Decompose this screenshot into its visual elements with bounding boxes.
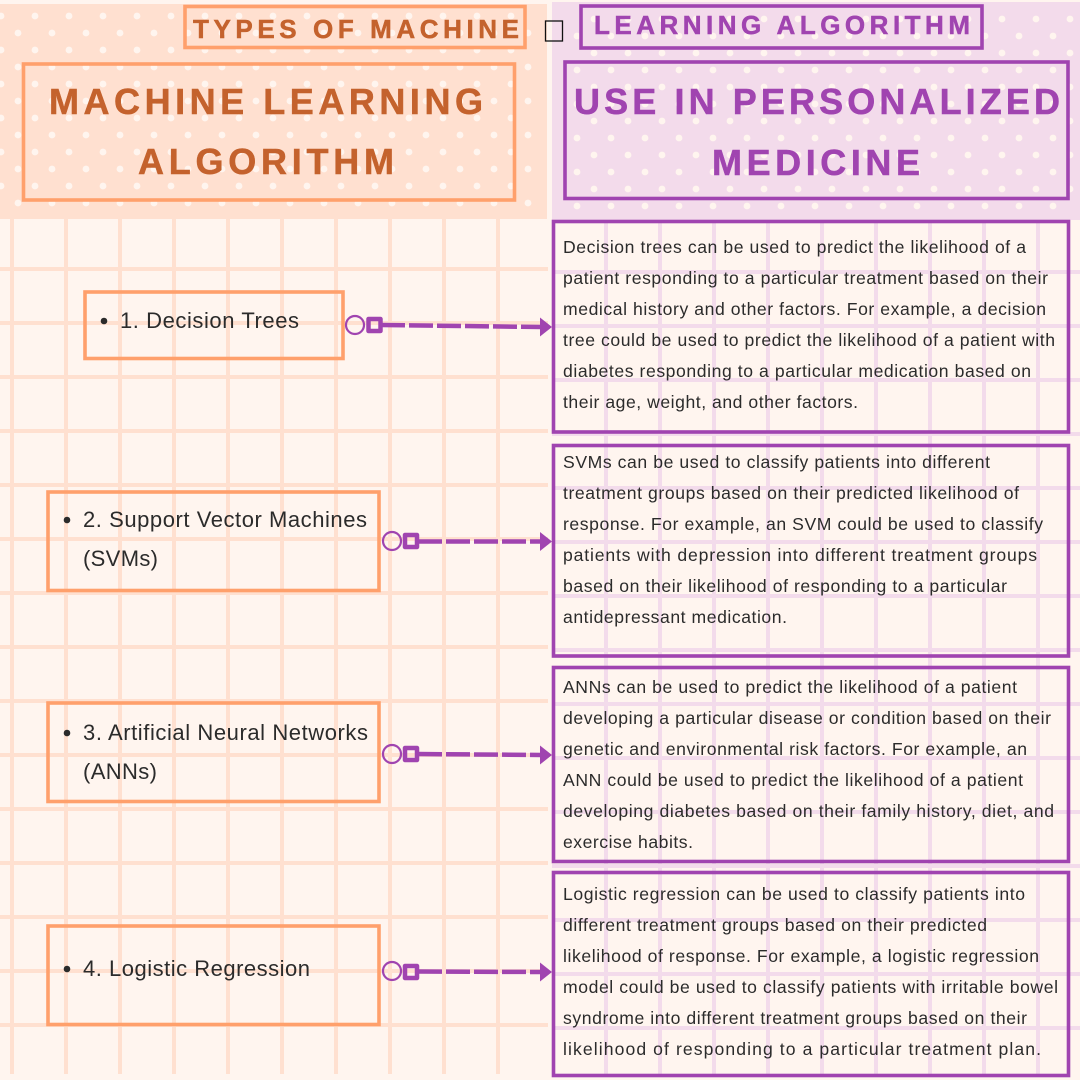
description 2: patients with depression into different treatment groups [563, 545, 1037, 565]
description 1 [554, 222, 1068, 432]
algorithm 3: artificial neural networks: (ANNs) [83, 759, 157, 784]
description 4: model could be used to classify patients with irritable bowel [563, 977, 1058, 997]
panel: left header background [0, 4, 547, 219]
description 3: ANNs can be used to predict the likelihood of a patient [563, 677, 1017, 697]
description 3: exercise habits. [563, 832, 693, 852]
description 2 [554, 446, 1068, 656]
description 4: likelihood of response. For example, a logistic regression [563, 946, 1039, 966]
description 3: developing a particular disease or condition based on their [563, 708, 1051, 728]
algorithm 1: decision trees: 1. Decision Trees [120, 308, 299, 333]
description 2: antidepressant medication. [563, 607, 787, 627]
arrow: svm to description [383, 532, 552, 551]
description 1: medical history and other factors. For example, a decision [563, 299, 1046, 319]
description 3: developing diabetes based on their family history, diet, and [563, 801, 1054, 821]
arrow: decision trees to description [346, 316, 552, 336]
title right part [581, 6, 982, 48]
algorithm 3: artificial neural networks: 3. Artificial Neural Networks [83, 720, 368, 745]
description 1: their age, weight, and other factors. [563, 392, 858, 412]
description 1: Decision trees can be used to predict the likelihood of a [563, 237, 1026, 257]
description 3 [554, 668, 1068, 862]
title left part: TYPES OF MACHINE [193, 14, 519, 44]
heading: use in personalized medicine [565, 62, 1068, 198]
algorithm 3: artificial neural networks [48, 703, 379, 802]
description 2: SVMs can be used to classify patients into different [563, 452, 990, 472]
arrow: ann to description [383, 745, 552, 764]
description 1: tree could be used to predict the likelihood of a patient with [563, 330, 1055, 350]
heading: machine learning algorithm: ALGORITHM [138, 141, 394, 182]
description 2: response. For example, an SVM could be used to classify [563, 514, 1043, 534]
description 4: Logistic regression can be used to classify patients into [563, 884, 1025, 904]
algorithm 4: logistic regression [48, 926, 379, 1024]
panel: right header background [552, 2, 1080, 220]
description 2: treatment groups based on their predicted likelihood of [563, 483, 1019, 503]
grid background: right column [552, 220, 1080, 1074]
description 2: based on their likelihood of responding to a particular [563, 576, 1007, 596]
heading: machine learning algorithm [24, 64, 514, 200]
icon: missing glyph box [546, 21, 562, 41]
description 3: ANN could be used to predict the likelihood of a patient [563, 770, 1023, 790]
algorithm 2: support vector machines [48, 492, 379, 590]
arrow: logistic regression to description [383, 962, 552, 982]
algorithm 2: support vector machines: (SVMs) [83, 546, 158, 571]
grid background: left column [0, 219, 548, 1074]
description 1: patient responding to a particular treatment based on their [563, 268, 1048, 288]
algorithm 1: decision trees [85, 292, 343, 358]
description 4: likelihood of responding to a particular treatment plan. [563, 1039, 1041, 1059]
description 3: genetic and environmental risk factors. For example, an [563, 739, 1027, 759]
description 1: diabetes responding to a particular medication based on [563, 361, 1031, 381]
heading: machine learning algorithm: MACHINE LEARNING [49, 81, 483, 122]
description 4: different treatment groups based on their predicted [563, 915, 987, 935]
algorithm 2: support vector machines: 2. Support Vector Machines [83, 507, 367, 532]
heading: use in personalized medicine: USE IN PERSONALIZED [574, 81, 1060, 122]
title right part: LEARNING ALGORITHM [594, 10, 970, 40]
description 4: syndrome into different treatment groups based on their [563, 1008, 1027, 1028]
algorithm 4: logistic regression: 4. Logistic Regression [83, 956, 310, 981]
heading: use in personalized medicine: MEDICINE [712, 142, 920, 183]
description 4 [554, 872, 1068, 1076]
